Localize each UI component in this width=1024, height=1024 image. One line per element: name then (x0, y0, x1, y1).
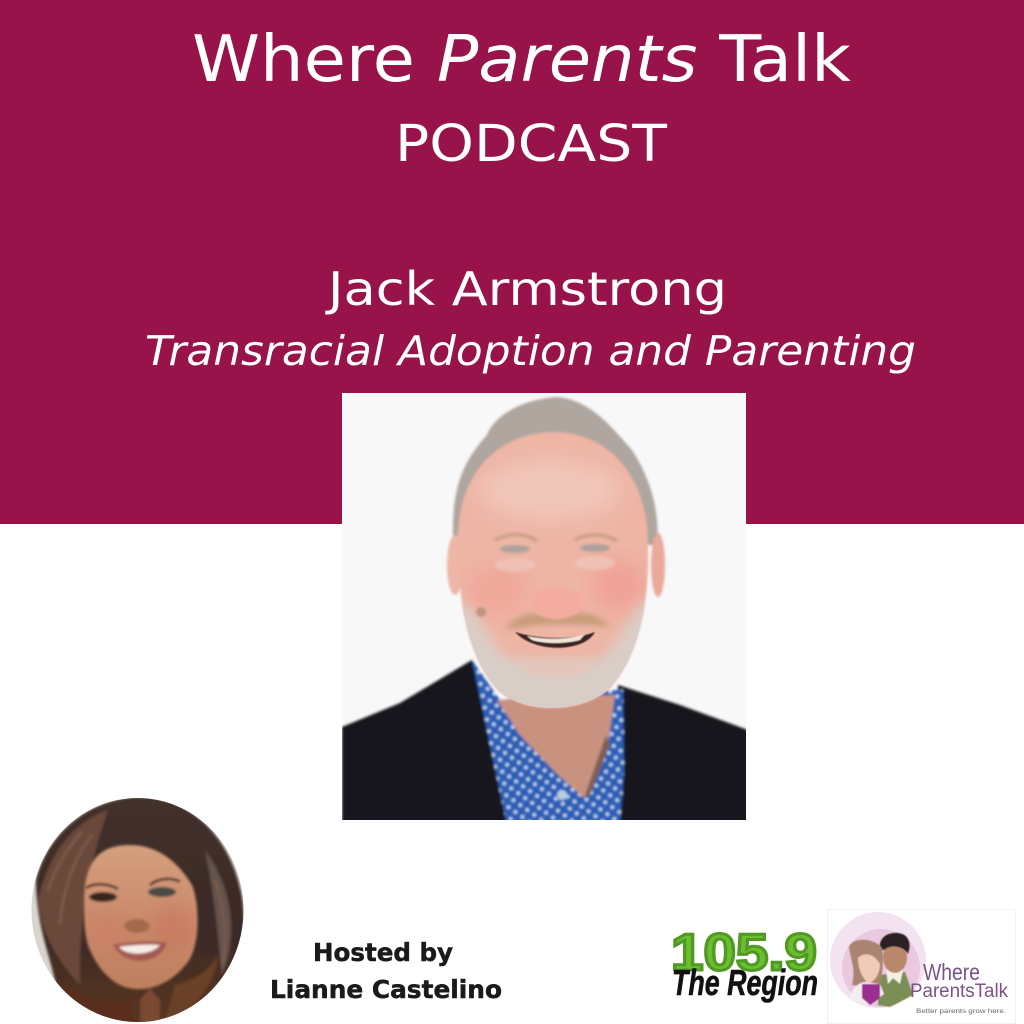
subtitle: PODCAST: PODCAST (395, 115, 668, 174)
logo: 105.9 The Region (671, 924, 818, 1003)
host name: Lianne Castelino (270, 975, 502, 1004)
title: Where Parents Talk: Where Parents Talk (192, 23, 851, 97)
logo: Where Parents Talk (828, 910, 1016, 1024)
host photo: Lianne Castelino (30, 796, 246, 1024)
logo circle and couple illustration (830, 912, 926, 1008)
forehead highlight (480, 460, 620, 520)
neck (497, 695, 615, 798)
logo wordmark: Where: Where (923, 959, 980, 985)
guest name: Jack Armstrong (325, 262, 727, 316)
man face (883, 941, 907, 973)
shirt (472, 660, 624, 825)
moustache (505, 613, 610, 630)
cheeks (472, 568, 522, 612)
logo frequency number: 105.9 (671, 924, 817, 982)
jacket (342, 660, 748, 825)
nose (536, 588, 580, 620)
ears (447, 535, 463, 595)
eyes (495, 558, 535, 572)
man shirt (878, 972, 913, 1007)
woman face (858, 954, 880, 983)
mouth (515, 632, 595, 648)
banner background (0, 0, 1024, 524)
woman top (850, 982, 884, 1005)
hair (453, 397, 658, 545)
woman hair (849, 940, 883, 988)
hosted by label: Hosted by (313, 938, 453, 967)
logo station name: The Region (672, 962, 818, 1003)
host credit text (270, 938, 502, 1004)
face (458, 432, 648, 708)
logo frame (828, 910, 1016, 1024)
guest photo: Jack Armstrong (342, 393, 748, 825)
logo wordmark: ParentsTalk: ParentsTalk (910, 981, 1008, 1002)
logo tagline: Better parents grow here. (916, 1008, 1006, 1015)
episode topic: Transracial Adoption and Parenting (145, 327, 916, 375)
face (84, 845, 198, 989)
beard (462, 600, 645, 708)
hair mass (36, 797, 244, 1024)
